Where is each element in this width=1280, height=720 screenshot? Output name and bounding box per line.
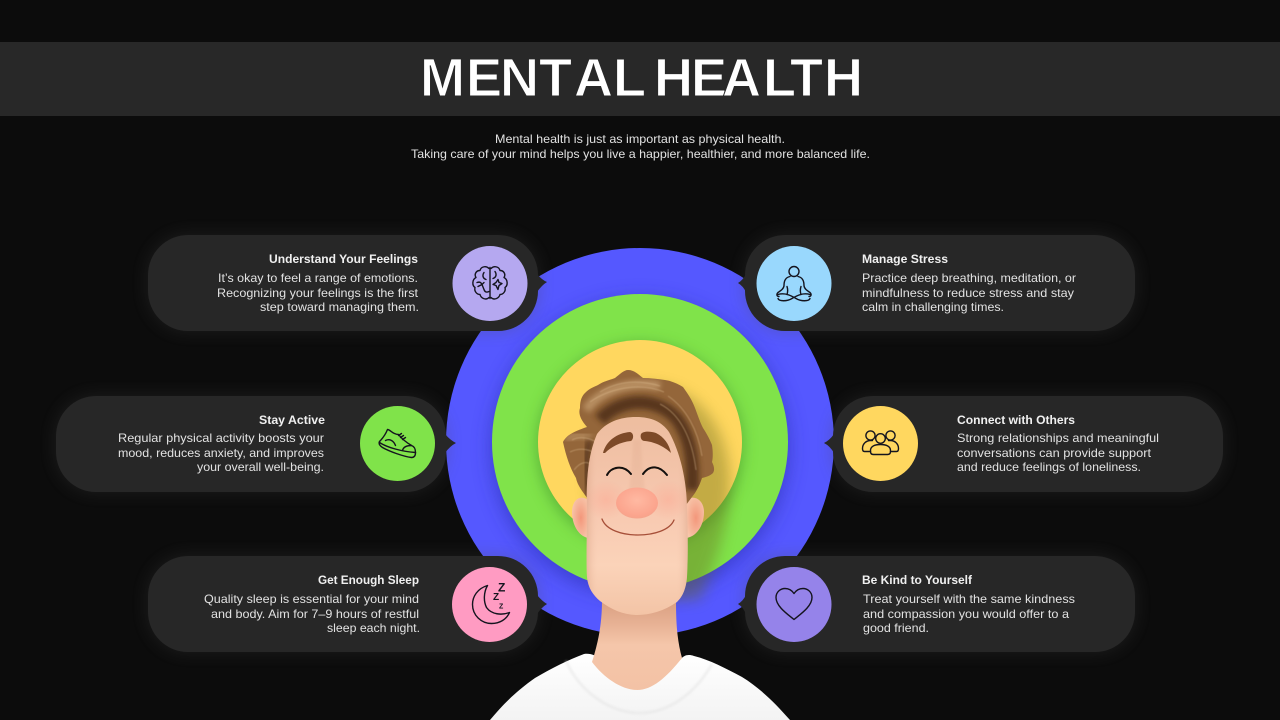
body text [118,431,324,474]
body text: It’s okay to feel a range of emotions. [218,271,418,285]
body text [217,271,419,314]
panel: manage stress [738,235,1135,331]
head shadow [588,385,730,600]
subtitle: Taking care of your mind helps you live a happier, healthier, and more balanced life. [411,147,870,161]
nose bridge [629,440,645,490]
body text: sleep each night. [327,621,420,635]
face [584,417,690,615]
body text: mindfulness to reduce stress and stay [862,286,1074,300]
ear left [572,498,588,538]
body text: your overall well-being. [197,460,324,474]
shirt [490,654,790,720]
heading: Get Enough Sleep [318,573,419,587]
ear right [686,498,704,538]
eye left [607,468,631,475]
icon: group of people [843,406,918,481]
body text: Treat yourself with the same kindness [863,592,1075,606]
body text: and compassion you would offer to a [863,607,1069,621]
icon: heart [756,567,832,642]
body text: and reduce feelings of loneliness. [957,460,1141,474]
panel: connect with others [824,396,1223,492]
subtitle [411,132,870,161]
heading: Manage Stress [862,252,948,266]
body text: Strong relationships and meaningful [957,431,1159,445]
icon: meditation [756,246,832,321]
body text: Regular physical activity boosts your [118,431,324,445]
body text [863,592,1075,635]
blush left [584,480,628,520]
title banner [0,42,1280,116]
eyebrow left [603,432,633,453]
character illustration [490,370,790,720]
eye right [643,467,667,475]
subtitle: Mental health is just as important as physical health. [495,132,785,146]
panel: get enough sleep [148,556,547,652]
concentric circles [446,248,834,636]
icon: moon and zzz: Z [498,580,505,594]
icon: running shoe [360,406,435,481]
body text: good friend. [863,621,929,635]
heading: Connect with Others [957,413,1075,427]
body text: calm in challenging times. [862,300,1004,314]
body text: conversations can provide support [957,446,1152,460]
eyebrow right [641,432,671,453]
icon: brain [452,246,528,321]
title: MENTAL HEALTH [420,48,863,108]
panel: stay active [56,396,456,492]
icon: moon and zzz [452,567,527,642]
body text: Practice deep breathing, meditation, or [862,271,1076,285]
blush right [646,480,690,520]
panel: be kind to yourself [738,556,1135,652]
body text [957,431,1159,474]
body text: mood, reduces anxiety, and improves [118,446,324,460]
body text [862,271,1076,314]
smile [602,519,674,535]
body text: Recognizing your feelings is the first [217,286,419,300]
body text: Quality sleep is essential for your mind [204,592,419,606]
hair [563,370,714,505]
icon: moon and zzz: Z [499,604,504,610]
nose [616,488,658,518]
heading: Be Kind to Yourself [862,573,973,587]
body text: step toward managing them. [260,300,419,314]
icon: moon and zzz: Z [493,592,499,603]
body text [204,592,420,635]
heading: Understand Your Feelings [269,252,418,266]
neck [592,600,682,690]
panel: understand your feelings [148,235,547,331]
body text: and body. Aim for 7–9 hours of restful [211,607,419,621]
heading: Stay Active [259,413,325,427]
